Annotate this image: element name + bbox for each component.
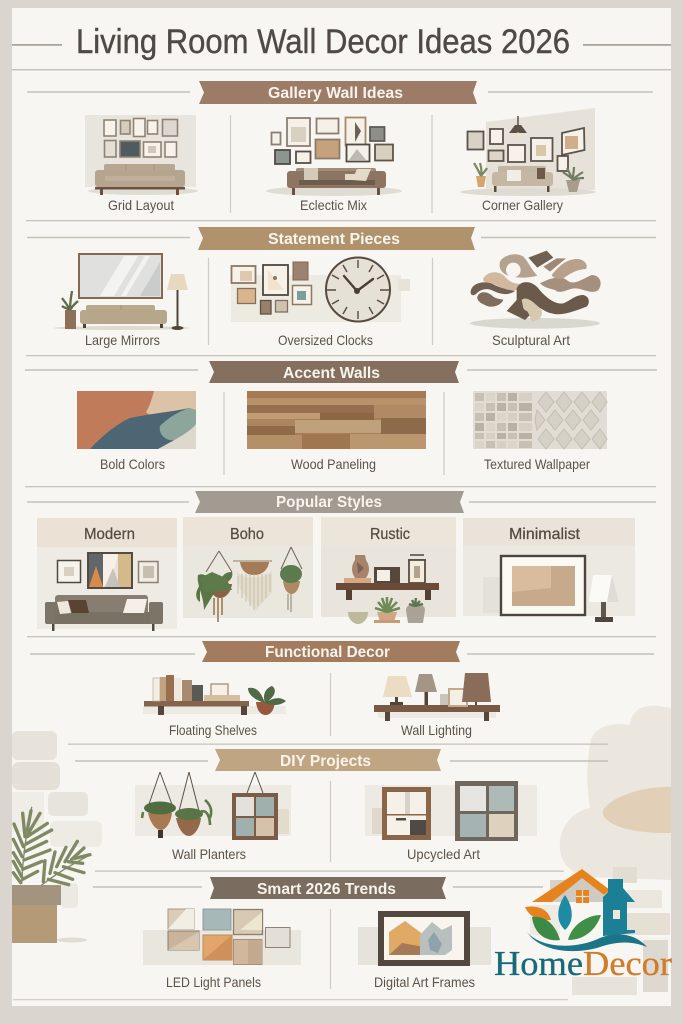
card: Minimalist: Minimalist xyxy=(509,526,581,543)
card: Modern: Modern xyxy=(84,526,135,543)
logo: HomeDecor xyxy=(494,869,672,983)
banner: DIY Projects xyxy=(215,749,441,771)
label: corner gallery: Corner Gallery xyxy=(482,197,563,213)
swatch: textured wallpaper xyxy=(473,391,607,449)
card: Modern xyxy=(37,518,177,631)
banner: Gallery Wall Ideas xyxy=(199,81,477,104)
illustration: eclectic mix xyxy=(266,118,402,196)
illustration: grid layout xyxy=(85,115,198,195)
banner: DIY Projects: DIY Projects xyxy=(280,753,371,770)
card: Boho xyxy=(183,517,313,622)
banner: Gallery Wall Ideas: Gallery Wall Ideas xyxy=(268,85,403,102)
section: Smart 2026 Trends xyxy=(93,877,543,990)
swatch: bold colors paint xyxy=(77,391,196,449)
banner: Functional Decor: Functional Decor xyxy=(265,644,390,661)
illustration: corner gallery xyxy=(460,108,596,196)
title: Living Room Wall Decor Ideas 2026 xyxy=(76,23,570,61)
label: large mirrors: Large Mirrors xyxy=(85,332,160,348)
illustration: sculptural art xyxy=(470,251,601,329)
banner: Accent Walls xyxy=(209,361,459,383)
banner: Statement Pieces xyxy=(198,227,475,250)
banner: Popular Styles xyxy=(195,491,464,513)
banner: Functional Decor xyxy=(202,641,460,662)
label: grid layout: Grid Layout xyxy=(108,197,174,213)
section: Functional Decor xyxy=(30,641,654,738)
label: oversized clocks: Oversized Clocks xyxy=(278,332,373,348)
label: LED light panels: LED Light Panels xyxy=(166,974,261,990)
banner: Smart 2026 Trends: Smart 2026 Trends xyxy=(257,881,396,898)
background: stone wall left xyxy=(12,731,102,908)
card: Rustic: Rustic xyxy=(370,526,410,543)
banner: Smart 2026 Trends xyxy=(210,877,446,899)
label: textured wallpaper: Textured Wallpaper xyxy=(484,456,590,472)
illustration: digital art frame xyxy=(358,911,491,966)
illustration: upcycled art xyxy=(365,781,537,841)
section: Popular Styles xyxy=(27,491,656,631)
label: eclectic mix: Eclectic Mix xyxy=(300,197,367,213)
label: wall lighting: Wall Lighting xyxy=(401,722,472,738)
logo: HomeDecor: HomeDecor xyxy=(494,944,672,983)
illustration: LED light panels xyxy=(143,909,301,965)
label: digital art frames: Digital Art Frames xyxy=(374,974,475,990)
section: Accent Walls xyxy=(25,361,657,475)
illustration: wall lighting xyxy=(374,673,500,721)
section: DIY Projects xyxy=(75,749,608,862)
label: sculptural art: Sculptural Art xyxy=(492,332,570,348)
clock xyxy=(326,258,390,322)
illustration: clock and frames collage xyxy=(231,258,410,322)
section: Statement Pieces xyxy=(27,227,656,348)
background: brush paint and stones right xyxy=(530,706,671,995)
swatch: wood paneling xyxy=(247,391,426,449)
label: wall planters: Wall Planters xyxy=(172,846,246,862)
left potted palm xyxy=(12,807,90,943)
banner: Statement Pieces: Statement Pieces xyxy=(268,231,400,248)
section: Gallery Wall Ideas xyxy=(27,81,653,213)
illustration: floating shelves xyxy=(143,675,286,715)
label: wood paneling: Wood Paneling xyxy=(291,456,376,472)
label: upcycled art: Upcycled Art xyxy=(407,846,480,862)
label: bold colors: Bold Colors xyxy=(100,456,165,472)
banner: Popular Styles: Popular Styles xyxy=(276,494,382,511)
card: Boho: Boho xyxy=(230,526,264,543)
card: Minimalist xyxy=(463,518,635,622)
label: floating shelves: Floating Shelves xyxy=(169,722,257,738)
illustration: large mirror with sofa xyxy=(54,254,190,330)
illustration: wall planters xyxy=(135,772,291,840)
banner: Accent Walls: Accent Walls xyxy=(283,365,380,382)
card: Rustic xyxy=(321,517,456,624)
